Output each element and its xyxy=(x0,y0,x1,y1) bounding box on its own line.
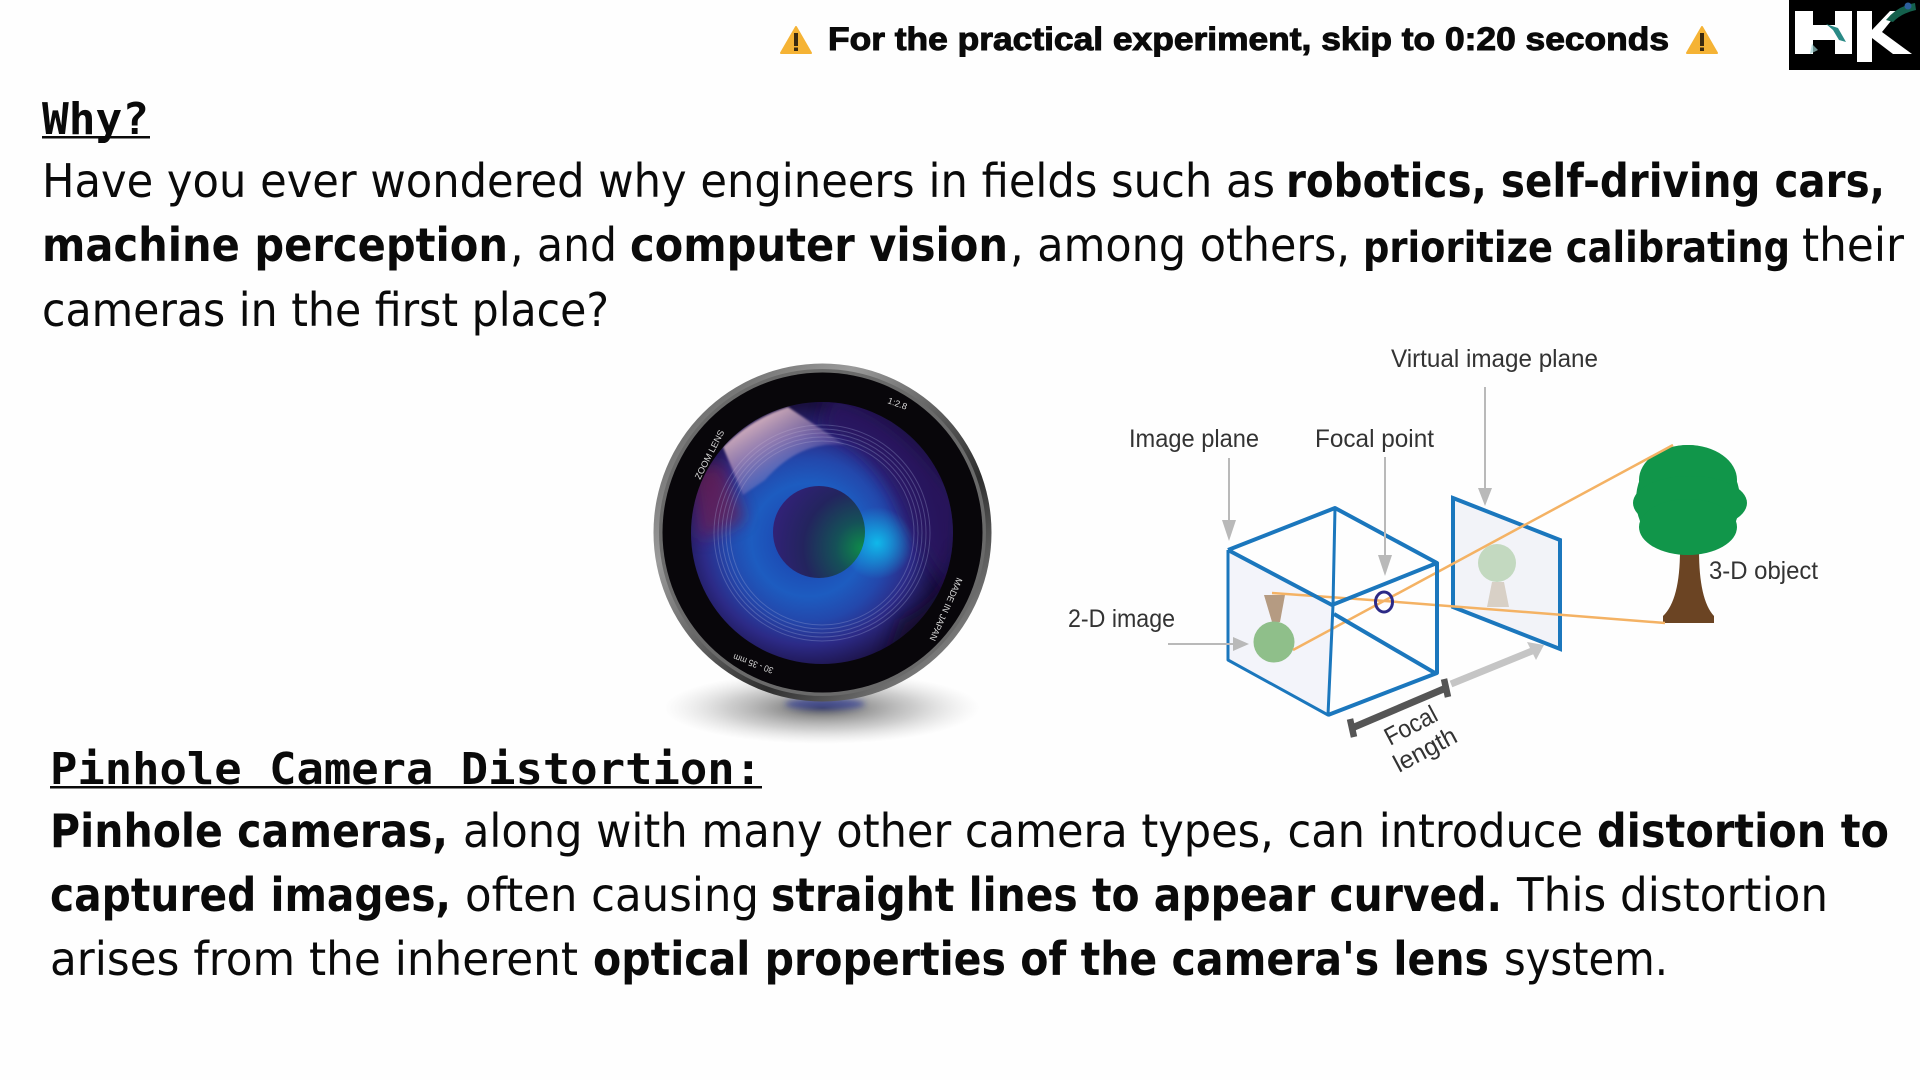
diagram labels: length xyxy=(1389,722,1462,778)
text block: why engineers calibrate: , among others, xyxy=(1010,218,1350,272)
grey pointer arrows xyxy=(1168,387,1492,651)
text block: pinhole distortion: often causing xyxy=(465,868,759,922)
HK logo xyxy=(1789,0,1920,70)
text block: why engineers calibrate: Have you ever wondered why engineers in fields such as xyxy=(42,154,1275,208)
image plane face xyxy=(1228,550,1332,715)
focal point marker xyxy=(1376,592,1392,612)
text block: pinhole distortion: system. xyxy=(1504,932,1668,986)
lens shadow xyxy=(664,672,980,744)
text block: why engineers calibrate: cameras in the first place? xyxy=(42,283,609,337)
diagram labels: 3-D object xyxy=(1709,557,1818,585)
text block: pinhole distortion: This distortion xyxy=(1516,868,1828,922)
text block: why engineers calibrate xyxy=(42,154,1904,337)
heading: Pinhole Camera Distortion: Pinhole Camera Distortion: xyxy=(50,744,762,795)
lens engravings: ZOOM LENS xyxy=(693,428,726,481)
text block: why engineers calibrate: computer vision xyxy=(630,218,1008,272)
diagram labels xyxy=(1068,345,1818,778)
diagram labels: Image plane xyxy=(1129,425,1259,453)
diagram labels: 2-D image xyxy=(1068,605,1175,633)
virtual image tree xyxy=(1478,544,1516,607)
lens body xyxy=(654,364,992,702)
text block: pinhole distortion: captured images, xyxy=(50,868,451,922)
warning icon right xyxy=(1687,27,1717,53)
camera box xyxy=(1228,508,1437,715)
text block: pinhole distortion: arises from the inherent xyxy=(50,932,578,986)
text block: pinhole distortion: Pinhole cameras, xyxy=(50,804,448,858)
heading: Why?: Why? xyxy=(42,94,149,145)
text block: pinhole distortion: along with many other camera types, can introduce xyxy=(463,804,1583,858)
diagram labels: Focal point xyxy=(1315,425,1434,453)
lens engravings: 30 - 35 mm xyxy=(732,652,775,676)
text block: pinhole distortion: distortion to xyxy=(1597,804,1889,858)
warning icon left xyxy=(781,27,811,53)
text block: pinhole distortion: optical properties of the camera's lens xyxy=(593,932,1489,986)
inverted 2-D tree xyxy=(1254,595,1294,662)
text block: why engineers calibrate: , and xyxy=(510,218,617,272)
text block: pinhole distortion: straight lines to appear curved. xyxy=(771,868,1502,922)
top notice text: For the practical experiment, skip to 0:20 seconds xyxy=(828,21,1669,57)
text block: why engineers calibrate: machine perception xyxy=(42,218,508,272)
text block: why engineers calibrate: prioritize calibrating xyxy=(1363,223,1790,273)
3-D tree object xyxy=(1633,445,1747,623)
lens engravings xyxy=(693,395,964,676)
lens engravings: 1:2.8 xyxy=(886,395,909,412)
camera lens illustration xyxy=(654,364,992,744)
light rays xyxy=(1272,445,1673,650)
virtual image plane xyxy=(1453,498,1560,649)
text block: why engineers calibrate: their xyxy=(1802,218,1904,272)
lens engravings: MADE IN JAPAN xyxy=(928,576,964,642)
diagram labels: Virtual image plane xyxy=(1391,345,1598,373)
focal length bar xyxy=(1350,642,1544,737)
diagram labels: Focal xyxy=(1380,700,1442,751)
text block: pinhole distortion xyxy=(50,804,1889,986)
pinhole camera diagram xyxy=(1068,345,1818,778)
